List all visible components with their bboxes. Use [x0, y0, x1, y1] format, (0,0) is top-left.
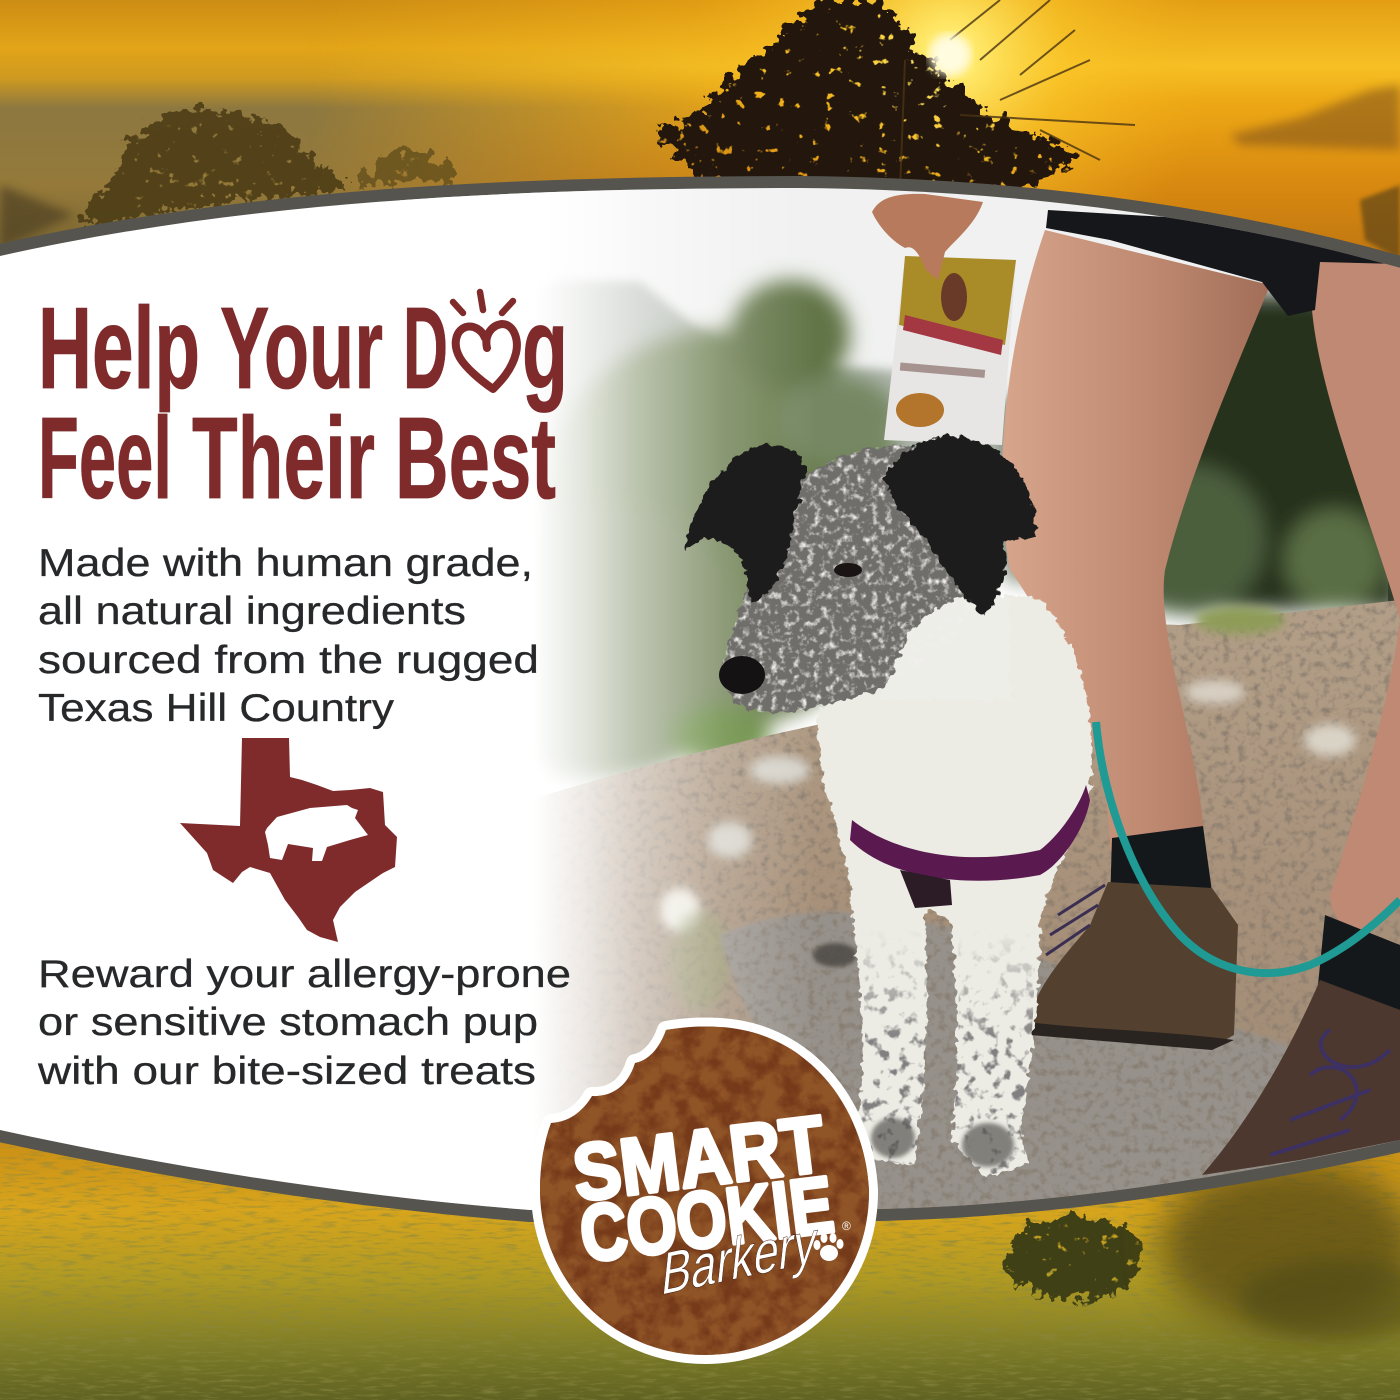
background: golden field	[0, 1130, 1400, 1400]
panel: hiking photo scene	[0, 180, 1400, 1220]
dog eye	[834, 563, 862, 577]
sky area	[400, 188, 1400, 398]
logo badge: Smart Cookie Barkery: SMART	[568, 1099, 829, 1218]
text block: ingredients	[38, 542, 539, 730]
dog black ear left	[685, 445, 807, 604]
curved gray frame	[0, 188, 1400, 1210]
heading	[38, 283, 568, 523]
teal leash	[1096, 722, 1400, 973]
text block: ingredients: all natural ingredients	[38, 590, 466, 633]
heading: D	[403, 283, 448, 413]
green foliage	[546, 265, 908, 784]
text block: ingredients: sourced from the rugged	[38, 639, 539, 682]
icon: paw print	[814, 1233, 844, 1261]
heading: g	[522, 283, 568, 413]
distant mountain	[563, 279, 1008, 562]
rock	[720, 912, 1400, 1210]
dog leg speckles	[855, 930, 1036, 1176]
registered mark: ®	[842, 1219, 851, 1233]
dog body	[818, 596, 1092, 1176]
logo badge: Smart Cookie Barkery: COOKIE	[575, 1160, 838, 1279]
icon: heart O with rays	[453, 292, 517, 389]
dark trees right	[1005, 295, 1400, 615]
text block: ingredients: Texas Hill Country	[38, 687, 395, 730]
heading: Help	[38, 283, 200, 413]
boot rear	[1202, 980, 1400, 1175]
socks	[1110, 826, 1212, 888]
dog head speckles	[720, 445, 980, 712]
background: trees on the horizon	[0, 0, 1135, 250]
dog nose	[719, 656, 765, 694]
text block: ingredients: Made with human grade,	[38, 542, 533, 585]
heading: Your	[220, 283, 383, 413]
ground	[400, 600, 1400, 1210]
text block: reward	[37, 953, 571, 1093]
heading: Best	[395, 393, 556, 523]
icon: Texas map with pig	[180, 738, 397, 942]
black shorts	[1046, 210, 1400, 316]
white fade over photo left	[0, 180, 860, 1220]
dog head	[720, 445, 1010, 712]
rock behind dog paw	[813, 943, 857, 967]
heading: Feel	[38, 393, 172, 523]
logo badge: Smart Cookie Barkery: Barkery	[659, 1207, 821, 1308]
hand	[872, 194, 983, 280]
logo badge: Smart Cookie Barkery	[540, 1026, 869, 1355]
boot front	[1028, 882, 1238, 1048]
heading: Their	[192, 393, 375, 523]
front leg of person	[1002, 230, 1270, 860]
purple harness	[850, 785, 1090, 881]
text block: reward: Reward your allergy-prone	[38, 953, 571, 996]
product pouch	[884, 256, 1016, 445]
background: sunset sky	[0, 0, 1400, 256]
dog black ear right	[883, 436, 1036, 615]
back leg of person	[1312, 262, 1400, 940]
text block: reward: or sensitive stomach pup	[38, 1001, 538, 1044]
text block: reward: with our bite-sized treats	[37, 1050, 536, 1093]
